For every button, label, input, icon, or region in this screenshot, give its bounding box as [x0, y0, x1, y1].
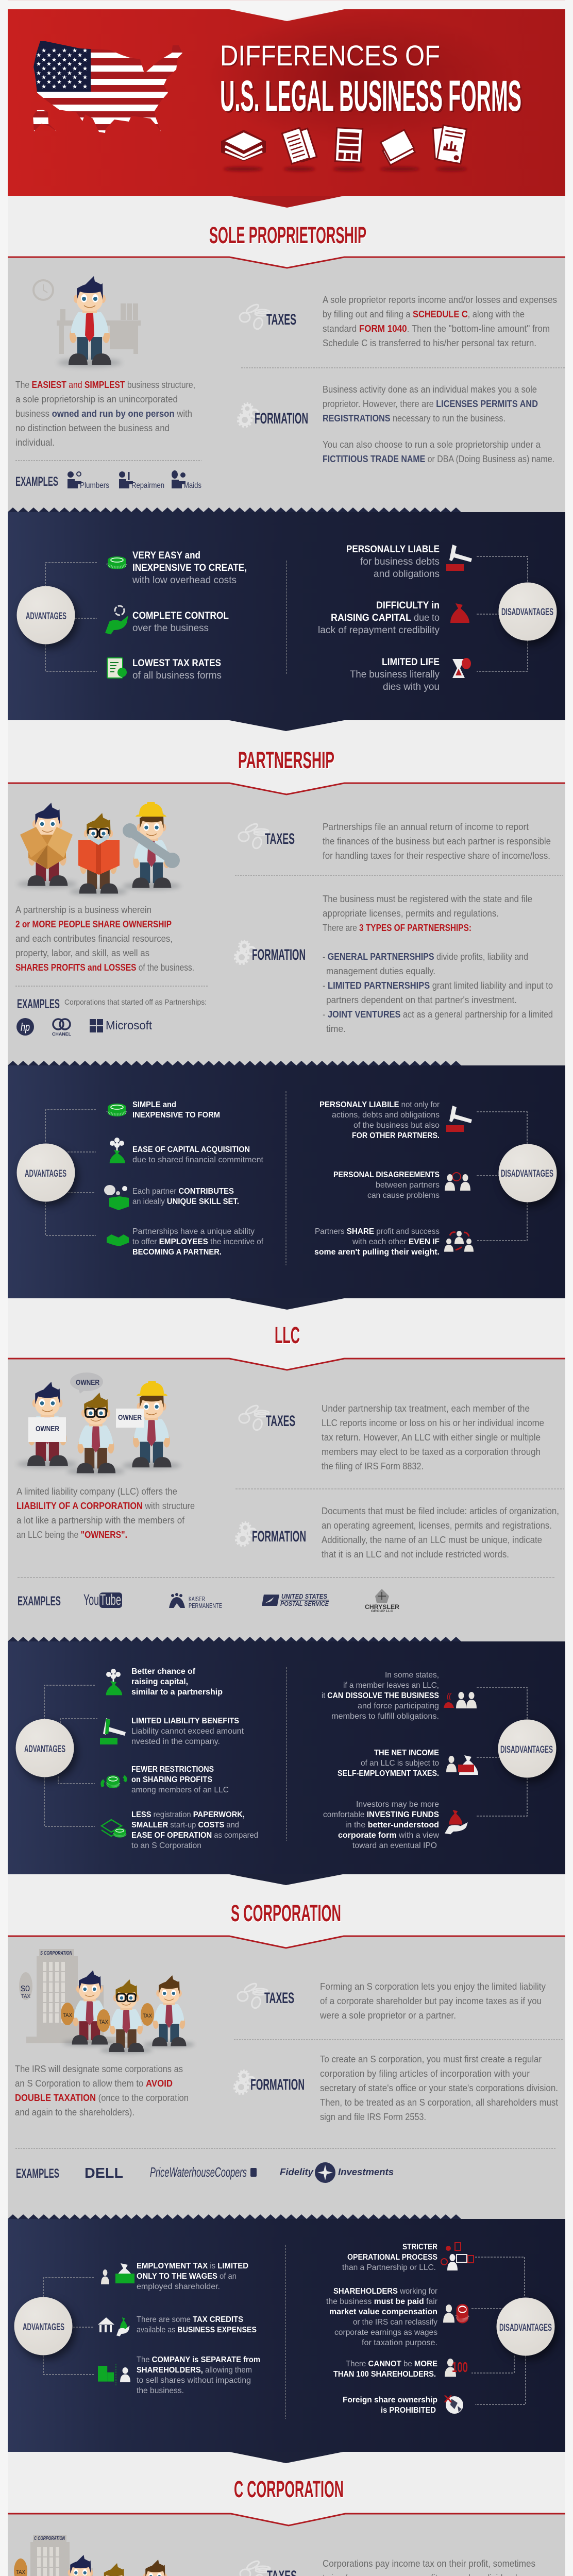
taxes block: for handling taxes for their respective share of income/loss. — [323, 851, 550, 861]
advantage: simple: SIMPLE and — [132, 1100, 176, 1109]
examples row: EXAMPLES — [16, 2166, 59, 2181]
advantage: simple: INEXPENSIVE TO FORM — [132, 1111, 220, 1120]
text: partnership description: and each contributes financial resources, — [15, 934, 173, 944]
section: sole proprietorship — [8, 196, 565, 731]
disadvantage: foreign ownership: is PROHIBITED — [381, 2406, 436, 2415]
formation block: appropriate licenses, permits and regulations. — [323, 908, 499, 919]
formation block: - LIMITED PARTNERSHIPS grant limited liability and input to — [323, 980, 553, 991]
advantages badge: ADVANTAGES — [23, 2322, 64, 2333]
formation block: that it is an LLC and not include restricted words. — [322, 1549, 509, 1560]
disadvantage: investors: toward an eventual IPO — [352, 1841, 437, 1850]
disadvantage: personally liable: of the business but also — [353, 1121, 440, 1130]
disadvantage: stricter process: OPERATIONAL PROCESS — [347, 2253, 437, 2262]
advantage: capital — [110, 1138, 264, 1164]
advantage: easy and inexpensive — [108, 550, 247, 586]
taxes block: TAXES — [266, 1413, 295, 1430]
disadvantage: share profit — [314, 1227, 474, 1257]
formation block: You can also choose to run a sole proprietorship under a — [323, 439, 541, 450]
formation block: The business must be registered with the state and file — [323, 894, 532, 904]
disadvantage: share profit: with each other EVEN IF — [352, 1238, 440, 1246]
advantage: simple — [108, 1100, 220, 1120]
logo: fidelity investments — [280, 2162, 394, 2183]
disadvantage: investors — [323, 1800, 468, 1850]
advantages badge: ADVANTAGES — [25, 1168, 66, 1179]
formation block: partners dependent on that partner's investment. — [326, 995, 517, 1005]
advantage: less paperwork: EASE OF OPERATION as compared — [131, 1831, 258, 1840]
disadvantage: shareholder compensation: corporate earnings as wages — [334, 2328, 437, 2337]
formation block: sign and file IRS Form 2553. — [320, 2112, 426, 2122]
advantage: skill set: Each partner CONTRIBUTES — [132, 1187, 234, 1196]
advantage: employment tax — [101, 2262, 248, 2291]
sign: owner: OWNER — [118, 1413, 142, 1422]
icon: US flag map — [31, 39, 186, 134]
advantage: easy and inexpensive: INEXPENSIVE TO CREATE, — [132, 563, 247, 573]
formation block: To create an S corporation, you must first create a regular — [320, 2054, 542, 2064]
formation block: time. — [326, 1024, 346, 1034]
advantages badge — [14, 2297, 72, 2355]
logo: kaiser permanente: PERMANENTE — [189, 1602, 222, 1609]
advantages badge — [16, 1144, 75, 1201]
logo: united states postal service — [262, 1592, 329, 1607]
illustration: three partners with box, book and wrench — [18, 802, 181, 895]
disadvantage: personally liable: FOR OTHER PARTNERS. — [352, 1131, 440, 1140]
text: LLC description — [16, 1486, 195, 1540]
logo: chrysler — [365, 1589, 399, 1613]
advantage: complete control — [105, 606, 229, 634]
heading: C corporation: C CORPORATION — [234, 2476, 344, 2502]
disadvantage: shareholder compensation: market value compensation — [329, 2308, 437, 2316]
section: C corporation — [8, 2452, 565, 2576]
disadvantage: dissolve: if a member leaves an LLC, — [343, 1681, 439, 1690]
advantage: raising capital: raising capital, — [131, 1677, 188, 1686]
disadvantage: personal disagreements: can cause problems — [367, 1191, 440, 1200]
text: S corporation description: an S Corporation to allow them to AVOID — [15, 2078, 173, 2089]
advantage: complete control: COMPLETE CONTROL — [132, 611, 229, 621]
advantage: capital: due to shared financial commitment — [132, 1156, 264, 1164]
logo: fidelity investments: Fidelity — [280, 2167, 314, 2177]
disadvantage: dissolve: and force participating — [358, 1702, 439, 1710]
taxes block: Under partnership tax treatment, each member of the — [322, 1403, 530, 1414]
formation block: management duties equally. — [326, 966, 435, 976]
disadvantage: personally liable: actions, debts and obligations — [332, 1111, 440, 1120]
title line 1: DIFFERENCES OF — [220, 39, 440, 72]
banner icons: documents — [221, 123, 467, 171]
taxes block: tax return. However, An LLC with either single or multiple — [322, 1432, 541, 1443]
speech bubble: owner — [70, 1372, 103, 1394]
logo: hp: hp — [21, 1021, 30, 1033]
logo: youtube: Tube — [100, 1591, 121, 1608]
disadvantage: investors: comfortable INVESTING FUNDS — [323, 1810, 439, 1819]
taxes block: the finances of the business but each partner is responsible — [323, 836, 551, 846]
disadvantage: personal disagreements — [333, 1171, 470, 1200]
disadvantage: shareholder compensation: or the IRS can reclassify — [353, 2318, 437, 2327]
heading: S corporation: S CORPORATION — [231, 1900, 341, 1926]
advantage: separate from shareholders: to sell shares without impacting — [137, 2376, 251, 2385]
illustration: businessman at desk — [33, 276, 141, 367]
examples row: EXAMPLES — [18, 1594, 61, 1608]
disadvantage: net income: SELF-EMPLOYMENT TAXES. — [338, 1769, 439, 1778]
formation block — [234, 2054, 558, 2122]
formation block — [235, 894, 553, 1034]
disadvantage: stricter process: STRICTER — [402, 2243, 437, 2251]
disadvantage: personally liable: PERSONALLY LIABLE — [346, 544, 440, 555]
advantage: lowest tax rates: LOWEST TAX RATES — [132, 658, 221, 669]
advantage: limited liability: LIMITED LIABILITY BENEFITS — [131, 1717, 239, 1725]
advantage: limited liability: nvested in the company. — [131, 1737, 220, 1746]
formation block: Additionally, the name of an LLC must be unique, indicate — [322, 1535, 542, 1545]
advantage: raising capital: similar to a partnership — [131, 1688, 223, 1697]
disadvantage: shareholder compensation — [326, 2287, 468, 2347]
disadvantage: net income: THE NET INCOME — [374, 1749, 439, 1757]
advantage: limited liability: Liability cannot exceed amount — [131, 1727, 244, 1736]
panel: advantages and disadvantages — [8, 2214, 565, 2452]
disadvantage: personally liable — [346, 544, 472, 580]
advantage: easy and inexpensive: VERY EASY and — [132, 550, 200, 561]
illustration: shareholders with tax bags and building: TAX — [21, 1994, 30, 1999]
disadvantage: net income — [338, 1749, 478, 1778]
advantage: employment tax: employed shareholder. — [137, 2282, 220, 2291]
advantage: raising capital: Better chance of — [131, 1667, 196, 1676]
advantage: separate from shareholders: the business. — [137, 2386, 184, 2395]
taxes block — [239, 822, 551, 861]
text: partnership description: 2 or MORE PEOPLE SHARE OWNERSHIP — [15, 919, 172, 929]
text: sole proprietorship description — [15, 380, 195, 448]
text: S corporation description: DOUBLE TAXATION (once to the corporation — [15, 2093, 189, 2103]
formation block: Documents that must be filed include: articles of organization, — [322, 1506, 559, 1516]
advantage: employees: Partnerships have a unique ability — [132, 1227, 255, 1236]
disadvantages badge — [499, 582, 557, 641]
disadvantage: 100 shareholders — [333, 2359, 468, 2379]
taxes block: Corporations pay income tax on their profit, sometimes — [323, 2558, 535, 2569]
taxes block: Partnerships file an annual return of income to report — [323, 822, 529, 832]
taxes block: Forming an S corporation lets you enjoy the limited liability — [320, 1981, 546, 1992]
disadvantages badge — [499, 1144, 557, 1202]
illustration: shareholders with tax bags and building: S CORPORATION — [40, 1951, 73, 1956]
text: partnership description: property, labor, and skill, as well as — [15, 948, 149, 958]
taxes block — [238, 1981, 546, 2021]
text: sole proprietorship description: a sole proprietorship is an unincorporated — [15, 394, 178, 404]
advantage: easy and inexpensive: with low overhead costs — [132, 575, 237, 586]
logo: youtube: You — [83, 1591, 99, 1608]
speech bubble: owner: OWNER — [76, 1378, 99, 1387]
formation block: an operating agreement, licenses, permits and registrations. — [322, 1520, 552, 1531]
disadvantage: raising capital: lack of repayment credibility — [318, 625, 440, 636]
disadvantage: net income: of an LLC is subject to — [361, 1759, 439, 1768]
advantage: lowest tax rates — [107, 658, 222, 681]
formation block: There are 3 TYPES OF PARTNERSHIPS: — [323, 923, 471, 933]
examples row — [16, 997, 207, 1037]
text: S corporation description — [15, 2064, 189, 2117]
logo: chrysler: CHRYSLER — [365, 1603, 399, 1611]
illustration: three owners with signs — [17, 1372, 181, 1475]
formation block: Then, to be treated as an S corporation, all shareholders must — [320, 2097, 558, 2108]
examples row: Corporations that started off as Partnerships: — [64, 998, 207, 1007]
formation block — [236, 1506, 559, 1560]
icon: maid — [172, 470, 186, 488]
icon: plumber — [68, 471, 81, 488]
logo: hp — [16, 1018, 34, 1036]
panel: advantages and disadvantages — [8, 1637, 565, 1874]
disadvantage: investors: Investors may be more — [356, 1800, 439, 1809]
taxes block: LLC reports income or loss on his or her individual income — [322, 1418, 544, 1428]
examples row: Plumbers — [80, 481, 109, 490]
formation block: proprietor. However, there are LICENSES PERMITS AND — [323, 399, 538, 409]
advantage: less paperwork — [102, 1810, 258, 1850]
disadvantage: 100 shareholders: THAN 100 SHAREHOLDERS. — [333, 2370, 436, 2379]
taxes block: by filling out and filing a SCHEDULE C, along with the — [323, 309, 525, 319]
disadvantage: stricter process — [342, 2243, 474, 2272]
advantage: employees — [107, 1227, 264, 1257]
text: sole proprietorship description: individual. — [15, 437, 55, 448]
advantage: tax credits — [98, 2315, 257, 2336]
disadvantage: stricter process: than a Partnership or LLC. — [342, 2263, 436, 2272]
examples row — [15, 470, 201, 490]
logo: united states postal service: UNITED STATES — [281, 1592, 327, 1600]
text: LLC description: LIABILITY OF A CORPORATION with structure — [16, 1501, 195, 1511]
disadvantage: share profit: Partners SHARE profit and success — [315, 1227, 440, 1236]
formation block: FORMATION — [250, 2076, 305, 2093]
text: partnership description: SHARES PROFITS and LOSSES of the business. — [15, 962, 194, 973]
taxes block — [240, 2558, 535, 2576]
section: LLC — [8, 1298, 565, 1874]
advantage: fewer restrictions — [102, 1765, 229, 1794]
formation block: - GENERAL PARTNERSHIPS divide profits, liability and — [323, 952, 528, 962]
disadvantages badge — [497, 2298, 554, 2355]
disadvantage: limited life: dies with you — [383, 682, 440, 692]
taxes block: were a sole proprietor or a partner. — [319, 2010, 456, 2021]
advantage: fewer restrictions: FEWER RESTRICTIONS — [131, 1765, 214, 1774]
taxes block: members may elect to be taxed as a corporation through — [322, 1447, 541, 1457]
logo: kaiser permanente — [169, 1593, 222, 1609]
logo: pricewaterhousecoopers: PriceWaterhouseCoopers — [150, 2164, 247, 2180]
text: sole proprietorship description: business owned and run by one person with — [15, 409, 192, 419]
disadvantage: dissolve: members to fulfill obligations. — [331, 1712, 439, 1721]
examples row: EXAMPLES — [15, 474, 58, 489]
advantage: separate from shareholders — [98, 2355, 260, 2395]
panel: advantages and disadvantages — [8, 1061, 565, 1298]
taxes block: standard FORM 1040. Then the "bottom-line amount" from — [323, 324, 550, 334]
disadvantage: dissolve — [322, 1671, 477, 1721]
logo: chanel: CHANEL — [52, 1032, 71, 1037]
disadvantage: personally liable: PERSONALY LIABILE not only for — [319, 1100, 440, 1109]
disadvantage: dissolve: it CAN DISSOLVE THE BUSINESS — [322, 1691, 439, 1700]
taxes block: Schedule C is transferred to his/her personal tax return. — [323, 338, 536, 348]
advantage: fewer restrictions: on SHARING PROFITS — [131, 1775, 212, 1784]
disadvantage: 100 shareholders: 100 — [452, 2359, 468, 2375]
advantage: fewer restrictions: among members of an LLC — [131, 1786, 229, 1794]
advantage: less paperwork: LESS registration PAPERWORK, — [131, 1810, 245, 1819]
advantage: separate from shareholders: SHAREHOLDERS, allowing them — [137, 2366, 252, 2375]
taxes block — [240, 295, 557, 348]
illustration: shareholders with tax bags and building — [14, 2535, 179, 2576]
logo: chrysler: GROUP LLC — [371, 1610, 394, 1613]
disadvantage: personally liable — [319, 1100, 472, 1140]
disadvantage: personally liable: for business debts — [360, 556, 440, 567]
disadvantage: 100 shareholders: There CANNOT be MORE — [346, 2360, 437, 2368]
text: sole proprietorship description: no distinction between the business and — [15, 423, 170, 433]
disadvantage: raising capital — [318, 600, 469, 636]
formation block: FICTITIOUS TRADE NAME or DBA (Doing Business as) name. — [323, 454, 554, 464]
examples row: EXAMPLES — [17, 997, 60, 1011]
formation block: FORMATION — [255, 410, 308, 427]
heading: sole proprietorship: SOLE PROPRIETORSHIP — [209, 222, 366, 248]
formation block: - JOINT VENTURES act as a general partnership for a limited — [323, 1009, 553, 1020]
disadvantage: limited life: LIMITED LIFE — [382, 657, 440, 668]
advantage: tax credits: available as BUSINESS EXPENSES — [137, 2326, 257, 2334]
advantage: employees: to offer EMPLOYEES the incentive of — [132, 1238, 264, 1246]
disadvantage: shareholder compensation: for taxation purpose. — [362, 2338, 437, 2347]
disadvantage: raising capital: RAISING CAPITAL due to — [331, 613, 440, 623]
advantage: skill set — [104, 1185, 239, 1210]
examples row: Maids — [183, 481, 201, 490]
sign: owner — [116, 1409, 144, 1428]
text: partnership description — [15, 905, 194, 973]
advantage: lowest tax rates: of all business forms — [132, 670, 222, 681]
advantage: employment tax: EMPLOYMENT TAX is LIMITED — [137, 2262, 248, 2270]
logo: united states postal service: POSTAL SERVICE — [280, 1600, 329, 1607]
taxes block: of a corporate shareholder but pay income taxes as if you — [320, 1996, 542, 2006]
disadvantage: shareholder compensation: SHAREHOLDERS working for — [333, 2287, 438, 2296]
panel: advantages and disadvantages — [8, 507, 565, 731]
advantage: less paperwork: SMALLER start-up COSTS and — [131, 1821, 239, 1829]
taxes block: TAXES — [265, 831, 295, 848]
examples row — [16, 2162, 394, 2183]
disadvantage: investors: in the better-understood — [345, 1821, 439, 1829]
examples row — [18, 1589, 399, 1613]
taxes block — [239, 1403, 544, 1471]
disadvantage: foreign ownership — [343, 2394, 463, 2415]
illustration: shareholders with tax bags and building: TAX — [99, 2019, 109, 2025]
heading: LLC: LLC — [275, 1322, 300, 1348]
advantage: complete control: over the business — [132, 623, 209, 634]
advantage: less paperwork: to an S Corporation — [131, 1841, 201, 1850]
disadvantage: investors: corporate form with a view — [338, 1831, 439, 1840]
disadvantage: personal disagreements: between partners — [376, 1181, 440, 1190]
formation block — [238, 384, 554, 464]
disadvantage: shareholder compensation: the business must be paid fair — [326, 2297, 438, 2306]
advantage: skill set: an ideally UNIQUE SKILL SET. — [132, 1197, 239, 1206]
logo: chanel — [52, 1019, 71, 1037]
formation block: Business activity done as an individual makes you a sole — [323, 384, 537, 395]
formation block: secretary of state's office or your state's corporations division. — [320, 2083, 558, 2093]
logo: dell: DELL — [85, 2165, 123, 2181]
advantage: capital: EASE OF CAPITAL ACQUISITION — [132, 1145, 250, 1154]
advantage: raising capital — [106, 1667, 223, 1697]
illustration: shareholders with tax bags and building — [19, 1949, 195, 2054]
logo: pricewaterhousecoopers — [150, 2164, 257, 2180]
illustration: shareholders with tax bags and building: TAX — [63, 2012, 73, 2019]
disadvantage: personally liable: and obligations — [374, 569, 440, 580]
illustration: shareholders with tax bags and building: TAX — [16, 2569, 26, 2575]
disadvantage: personal disagreements: PERSONAL DISAGREEMENTS — [333, 1171, 440, 1179]
logo: microsoft: Microsoft — [106, 1019, 153, 1032]
advantage: employment tax: ONLY TO THE WAGES of an — [137, 2272, 237, 2281]
logo: youtube — [83, 1591, 122, 1608]
sign: owner — [28, 1417, 66, 1442]
illustration: shareholders with tax bags and building: $0 — [21, 1985, 30, 1993]
taxes block: the filing of IRS Form 8832. — [322, 1461, 424, 1471]
icon: repairman — [119, 471, 133, 488]
illustration: shareholders with tax bags and building: TAX — [143, 2013, 153, 2019]
section: partnership — [8, 720, 565, 1298]
disadvantage: dissolve: In some states, — [385, 1671, 439, 1680]
text: partnership description: A partnership is a business wherein — [15, 905, 151, 915]
advantage: limited liability — [100, 1717, 244, 1746]
disadvantage: foreign ownership: X — [444, 2394, 452, 2405]
disadvantage: foreign ownership: Foreign share ownership — [343, 2396, 437, 2404]
logo: fidelity investments: Investments — [338, 2167, 394, 2177]
logo: kaiser permanente: KAISER — [189, 1595, 205, 1603]
text: sole proprietorship description: The EASIEST and SIMPLEST business structure, — [15, 380, 195, 390]
taxes block: TAXES — [264, 1990, 294, 2007]
taxes block: TAXES — [266, 311, 296, 328]
illustration: shareholders with tax bags and building: C CORPORATION — [34, 2536, 65, 2541]
advantage: separate from shareholders: The COMPANY is SEPARATE from — [137, 2355, 260, 2364]
examples row: Repairmen — [131, 481, 164, 490]
text: LLC description: an LLC being the "OWNERS". — [16, 1530, 127, 1540]
heading: partnership: PARTNERSHIP — [238, 747, 334, 773]
taxes block: A sole proprietor reports income and/or losses and expenses — [323, 295, 557, 305]
disadvantage: limited life — [350, 657, 471, 692]
advantage: employees: BECOMING A PARTNER. — [132, 1248, 222, 1257]
advantages badge: ADVANTAGES — [24, 1744, 65, 1755]
advantage: tax credits: There are some TAX CREDITS — [137, 2315, 243, 2324]
advantages badge: ADVANTAGES — [26, 611, 66, 622]
text: LLC description: A limited liability company (LLC) offers the — [16, 1486, 177, 1497]
advantages badge — [15, 1719, 74, 1777]
text: S corporation description: The IRS will designate some corporations as — [15, 2064, 183, 2074]
text: LLC description: a lot like a partnership with the members of — [16, 1515, 185, 1526]
section: S corporation — [8, 1874, 565, 2452]
sign: owner: OWNER — [36, 1425, 59, 1433]
formation block: FORMATION — [252, 946, 306, 963]
disadvantage: raising capital: DIFFICULTY in — [376, 600, 440, 611]
formation block: corporation by filing articles of incorporation with your — [320, 2069, 530, 2079]
title banner — [8, 9, 565, 208]
formation block: FORMATION — [252, 1528, 306, 1545]
text: S corporation description: and again to the shareholders). — [15, 2107, 134, 2117]
disadvantages badge — [498, 1720, 557, 1777]
disadvantage: share profit: some aren't pulling their weight. — [314, 1248, 440, 1257]
advantages badge — [16, 586, 75, 644]
disadvantage: limited life: The business literally — [350, 669, 440, 680]
formation block: REGISTRATIONS necessary to run the business. — [323, 413, 505, 423]
